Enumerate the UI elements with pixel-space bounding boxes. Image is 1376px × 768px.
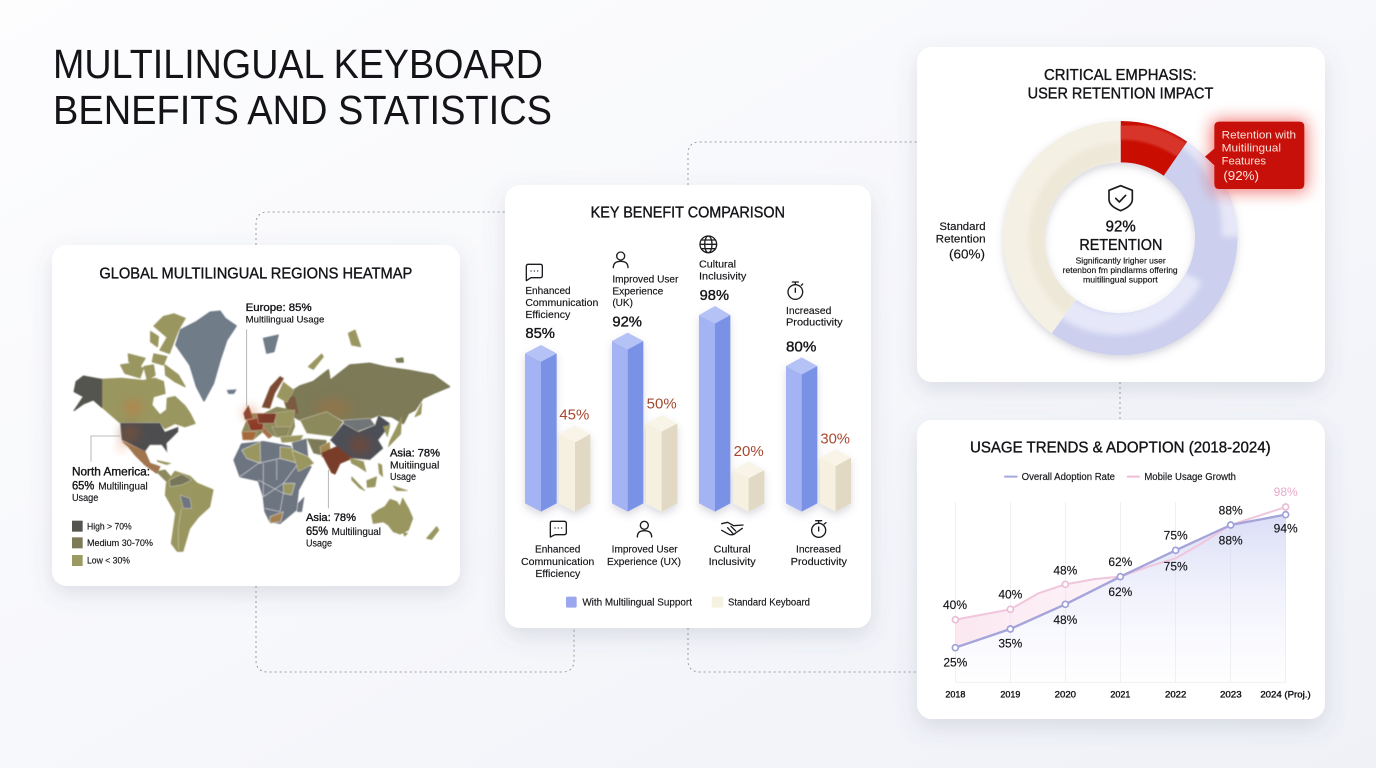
callout: Asia south: Usage: [306, 539, 332, 550]
bar legend: [566, 597, 810, 609]
series: mobile usage growth: [955, 507, 1286, 620]
world map: [74, 311, 449, 551]
value labels: 75%: [1164, 528, 1188, 542]
callout: Asia south: Asia: 78%: [306, 512, 356, 524]
center value: retenbon fm pindlarms offering: [1063, 265, 1178, 275]
value labels: 40%: [943, 598, 967, 612]
callout: Asia east: Muitiingual: [390, 461, 439, 472]
panel: user retention: [917, 47, 1325, 382]
callout: North America: Usage: [72, 493, 98, 504]
leader lines: [91, 329, 328, 508]
year axis: 2023: [1220, 689, 1242, 699]
top label: productivity: Increased: [786, 306, 832, 317]
value labels: 88%: [1219, 503, 1243, 517]
heading: trends: USAGE TRENDS & ADOPTION (2018-2024): [970, 440, 1271, 457]
bar legend: With Multilingual Support: [582, 598, 692, 609]
title: BENEFITS AND STATISTICS: [53, 87, 552, 133]
value labels: 98%: [1274, 485, 1298, 499]
bottom label: inclusivity: Inclusivity: [709, 557, 757, 568]
center value: RETENTION: [1079, 237, 1162, 254]
heading: retention: [1028, 67, 1214, 102]
top label: user experience: [612, 252, 679, 331]
segment: multilingual retention: [1051, 141, 1240, 362]
markers: mobile: [952, 504, 1289, 623]
top label: inclusivity: 98%: [700, 288, 729, 304]
center value: Significantly lrigher user: [1076, 255, 1166, 265]
value labels: 40%: [998, 587, 1023, 601]
year axis: 2024 (Proj.): [1260, 689, 1311, 699]
heading: retention: CRITICAL EMPHASIS:: [1044, 67, 1197, 84]
bar group: inclusivity: [699, 306, 764, 512]
center value: muitilingual support: [1083, 275, 1158, 285]
bottom label: productivity: Productivity: [791, 557, 848, 568]
top label: communication: Efficiency: [525, 310, 571, 321]
top label: productivity: [786, 282, 844, 355]
top label: productivity: 80%: [786, 339, 816, 355]
callout: retention with features: [1205, 120, 1307, 192]
segment: standard retention: [1000, 121, 1124, 338]
year axis: 2022: [1165, 689, 1186, 699]
bottom label: user experience: [607, 521, 681, 568]
value labels: 88%: [1219, 533, 1243, 547]
top label: user experience: (UK): [612, 298, 633, 309]
callout: Europe: Europe: 85%: [246, 302, 312, 314]
donut chart: [998, 117, 1245, 363]
region: Southeast Asia and Japan: [350, 417, 407, 491]
top label: communication: [525, 264, 599, 342]
bottom label: user experience: Experience (UX): [607, 557, 681, 568]
callout: retention with features: Muitilingual: [1222, 143, 1281, 155]
top label: user experience: Experience: [612, 286, 664, 297]
standard keyboard values: 45%: [559, 407, 589, 423]
value labels: 62%: [1108, 555, 1133, 569]
region: USA: [120, 423, 178, 453]
top label: productivity: Productivity: [786, 318, 844, 329]
standard keyboard values: [559, 396, 850, 460]
region: Russia: [283, 363, 449, 423]
value labels: 75%: [1164, 560, 1188, 574]
year axis: 2019: [1000, 689, 1020, 699]
bottom label: communication: Efficiency: [535, 569, 581, 580]
year axis: [945, 689, 1311, 699]
value labels: 62%: [1108, 585, 1133, 599]
bar group: communication: [525, 345, 590, 512]
top label: communication: Enhanced: [525, 286, 571, 297]
bottom label: communication: Enhanced: [535, 545, 581, 556]
bottom label: productivity: [791, 521, 848, 568]
callout: Asia south: Multilingual: [332, 527, 381, 538]
bar legend: Standard Keyboard: [728, 598, 810, 609]
panel: global heatmap: [52, 245, 460, 586]
standard keyboard values: 30%: [820, 431, 850, 447]
year axis: 2018: [945, 689, 965, 699]
line legend: Overall Adoption Rate: [1022, 472, 1115, 483]
panel: key benefit comparison: [505, 185, 871, 628]
top label: user experience: Improved User: [612, 275, 679, 286]
value labels: 35%: [998, 637, 1023, 651]
heading: retention: USER RETENTION IMPACT: [1028, 85, 1214, 102]
value labels: [943, 485, 1298, 670]
series: overall adoption: [955, 515, 1286, 648]
value labels: 48%: [1053, 563, 1078, 577]
callout: Asia east: Usage: [390, 472, 416, 483]
icon: shield: [1109, 186, 1132, 211]
area fills: [955, 577, 1120, 648]
region: Middle and Central Asia: [280, 412, 375, 472]
value labels: 48%: [1053, 613, 1078, 627]
standard keyboard values: 20%: [734, 444, 764, 460]
label: standard retention: (60%): [949, 247, 985, 261]
callout: North America: Multilingual: [98, 481, 148, 492]
year axis: 2021: [1110, 689, 1130, 699]
heading: key benefit: KEY BENEFIT COMPARISON: [591, 204, 785, 221]
line chart: [952, 502, 1289, 682]
callout: Asia east: [390, 448, 440, 483]
markers: adoption: [952, 512, 1289, 651]
region: Alaska: [74, 376, 102, 411]
top label: communication: 85%: [525, 326, 555, 342]
top label: inclusivity: Cultural: [699, 260, 736, 271]
region: China: [330, 415, 390, 460]
center value: 92%: [1106, 219, 1136, 236]
line legend: [1005, 472, 1236, 483]
title: MULTILINGUAL KEYBOARD: [53, 41, 543, 87]
value labels: 25%: [943, 656, 968, 670]
standard keyboard values: 50%: [647, 396, 677, 412]
map legend: High > 70%: [87, 521, 132, 531]
label: standard retention: Retention: [936, 234, 986, 246]
top label: inclusivity: Inclusivity: [699, 272, 747, 283]
top label: user experience: 92%: [612, 315, 642, 331]
label: standard retention: [936, 221, 986, 261]
panel: usage trends: [917, 420, 1325, 719]
callout: Asia east: Asia: 78%: [390, 448, 440, 460]
callout: Asia south: [306, 512, 381, 550]
bar group: user experience: [612, 333, 677, 512]
callout: retention with features: (92%): [1223, 168, 1259, 183]
segment: highlighted retention: [1118, 121, 1188, 180]
region: Africa: [234, 442, 311, 523]
map legend: Low < 30%: [87, 555, 130, 565]
value labels: 94%: [1274, 522, 1298, 536]
callout: Europe: Multilingual Usage: [246, 314, 324, 324]
bottom label: inclusivity: [709, 522, 757, 568]
top label: communication: Communication: [525, 298, 599, 309]
bottom label: communication: [521, 521, 595, 580]
bottom label: user experience: Improved User: [612, 545, 678, 556]
bottom label: communication: Communication: [521, 557, 595, 568]
bottom label: productivity: Increased: [796, 545, 841, 556]
region: Mexico and Central America: [123, 442, 160, 473]
top label: inclusivity: [699, 236, 747, 304]
callout: North America: [72, 466, 150, 504]
title: [53, 41, 552, 133]
callout: retention with features: Features: [1222, 155, 1267, 167]
callout: Europe: [246, 302, 324, 324]
region: Europe: [242, 407, 295, 440]
dashed connectors: [256, 142, 1120, 672]
region: India: [322, 447, 352, 474]
map legend: [72, 521, 153, 566]
bottom label: inclusivity: Cultural: [714, 545, 751, 556]
region: Greenland: [176, 311, 236, 401]
bar group: productivity: [786, 357, 851, 512]
year axis: 2020: [1055, 689, 1076, 699]
line legend: Mobile Usage Growth: [1144, 472, 1236, 483]
heading: heatmap: GLOBAL MULTILINGUAL REGIONS HEATMAP: [99, 265, 412, 282]
map legend: Medium 30-70%: [87, 538, 153, 548]
center value: [1063, 219, 1178, 285]
label: standard retention: Standard: [939, 221, 986, 233]
callout: retention with features: Retention with: [1222, 129, 1296, 141]
region: South America: [166, 472, 213, 551]
region: Australia and New Zealand: [372, 498, 439, 539]
callout: North America: 65%: [72, 479, 94, 492]
callout: North America: North America:: [72, 466, 150, 479]
callout: Asia south: 65%: [306, 525, 328, 538]
